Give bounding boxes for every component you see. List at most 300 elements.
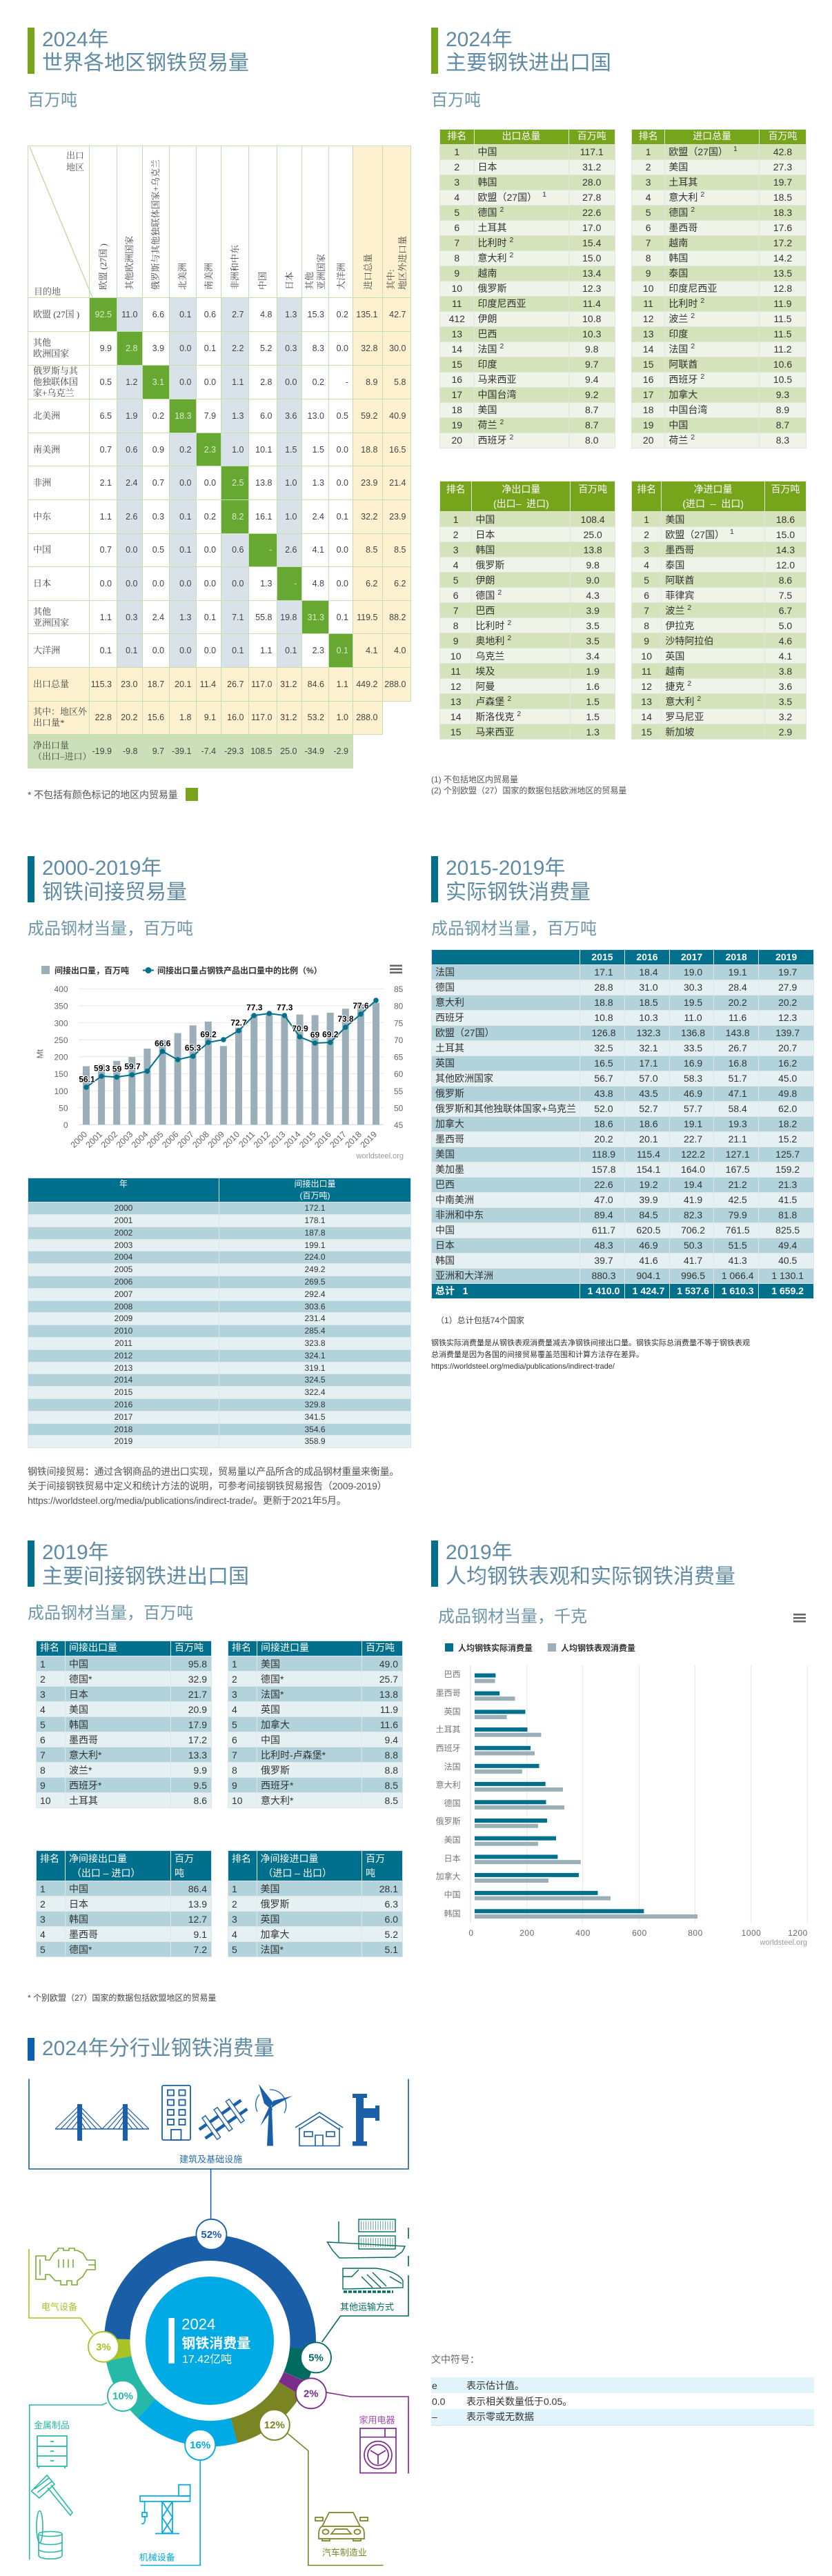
table: trade matrix: 117.0 <box>251 713 272 722</box>
heading: symbols: 文中符号： <box>431 2354 479 2365</box>
table: true steel use by country: 28.8 <box>594 982 613 993</box>
table: true steel use by country: 韩国 <box>435 1255 455 1266</box>
table: trade matrix: 0.1 <box>204 344 216 353</box>
table: trade matrix: 0.0 <box>337 344 348 353</box>
table: exports: 印度 <box>477 359 497 370</box>
icon: drawer cabinet <box>37 2436 67 2468</box>
title: per capita use: 人均钢铁表观和实际钢铁消费量 <box>446 1565 735 1588</box>
table: imports: 美国 <box>668 161 688 172</box>
table: indirect exports by year: 2000 <box>115 1203 132 1213</box>
table: true steel use by country: 20.2 <box>729 997 747 1008</box>
table: net indirect exports: 2 <box>40 1899 46 1910</box>
table: true steel use by country: 50.3 <box>684 1240 702 1251</box>
table: exports <box>439 129 615 448</box>
table: net indirect imports: 净间接进口量 <box>261 1853 319 1864</box>
table: imports: 欧盟（27国） 1 <box>668 145 737 157</box>
panel: symbols legend <box>431 2354 814 2426</box>
title: major exporters and importers: 主要钢铁进出口国 <box>446 52 611 75</box>
table: imports: 8 <box>646 252 651 264</box>
text block: true steel use definition <box>431 1338 750 1370</box>
text block: definition of indirect trade: https://worldsteel.org/media/publications/indirect-trade/。更新于2021年5月。 <box>28 1494 346 1505</box>
table: indirect imports: 排名 <box>232 1642 251 1653</box>
table: net exports: 埃及 <box>475 665 495 676</box>
table: imports: 16 <box>643 374 653 385</box>
table: indirect exports by year: 2012 <box>115 1351 132 1360</box>
table: trade matrix: 3.9 <box>152 344 164 353</box>
table: net exports: 马来西亚 <box>475 726 514 737</box>
table: true steel use by country: 俄罗斯 <box>435 1088 464 1099</box>
table: trade matrix: 0.2 <box>179 445 191 455</box>
x axis labels: 2008 <box>190 1129 211 1150</box>
table: trade matrix: 其中：地区外 <box>33 706 87 717</box>
x axis labels: 2006 <box>160 1129 181 1150</box>
table: trade matrix: 0.5 <box>152 545 164 555</box>
table: true steel use by country: 21.3 <box>778 1179 797 1190</box>
table: true steel use by country: 22.6 <box>594 1179 613 1190</box>
table: net imports: 8 <box>644 620 649 631</box>
left axis labels: 300 <box>54 1018 68 1028</box>
table: true steel use by country: 19.7 <box>778 967 797 978</box>
table: indirect exports: 6 <box>40 1734 46 1745</box>
right axis labels: 45 <box>394 1120 404 1130</box>
center total: 2024 <box>181 2315 215 2333</box>
table: imports: 8.3 <box>776 435 789 446</box>
x axis labels: 0 <box>468 1928 474 1938</box>
x axis labels: 2019 <box>359 1129 379 1150</box>
table: trade matrix: 16.5 <box>389 445 406 455</box>
x axis labels <box>468 1928 808 1938</box>
table: net imports: 5.0 <box>779 620 792 631</box>
country labels: 加拿大 <box>436 1871 461 1881</box>
x axis labels: 2015 <box>297 1129 318 1150</box>
table: true steel use by country: 27.9 <box>778 982 797 993</box>
table: trade matrix: 2.4 <box>126 478 138 488</box>
panel: major indirect steel exporters and importers <box>28 1540 403 2003</box>
table: indirect exports by year: 2014 <box>115 1375 132 1385</box>
table: net exports: 3.4 <box>586 650 600 661</box>
table: indirect exports by year: 358.9 <box>304 1436 326 1446</box>
label: mechanical equipment: 机械设备 <box>139 2553 175 2562</box>
table: exports: 13.4 <box>582 268 601 279</box>
table: net indirect imports: 3 <box>232 1914 237 1925</box>
table: trade matrix: 1.8 <box>179 713 191 722</box>
table: true steel use by country: 11.0 <box>684 1012 702 1023</box>
table: trade matrix: 0.0 <box>204 579 216 588</box>
table: indirect exports: 8 <box>40 1765 46 1776</box>
table: indirect imports: 8 <box>232 1765 237 1776</box>
table: net imports: 2.9 <box>779 726 792 737</box>
table: trade matrix: 32.2 <box>361 512 377 522</box>
icon: high-speed train <box>343 2268 403 2292</box>
table: net exports: 韩国 <box>475 544 495 555</box>
table: net indirect imports: 2 <box>232 1899 237 1910</box>
table: true steel use by country: 19.1 <box>684 1118 702 1129</box>
data labels: 59.3 <box>94 1063 110 1073</box>
table: exports: 9.4 <box>585 374 598 385</box>
table: net indirect imports: 5 <box>232 1944 237 1955</box>
icon: motor <box>36 2248 95 2285</box>
table: true steel use by country: 19.4 <box>684 1179 702 1190</box>
table: indirect exports by year: 2008 <box>115 1302 132 1311</box>
table: indirect exports by year: 187.8 <box>304 1228 326 1238</box>
table: indirect exports: 13.3 <box>188 1750 207 1761</box>
table: trade matrix: 南美洲 <box>33 444 60 455</box>
left axis labels: 50 <box>59 1104 68 1113</box>
table: indirect exports by year: 2019 <box>115 1436 132 1446</box>
table: trade matrix: 288.0 <box>384 680 406 689</box>
table: true steel use by country: 16.9 <box>684 1058 702 1069</box>
data labels: 77.3 <box>246 1002 263 1012</box>
title: sector use: 2024年分行业钢铁消费量 <box>42 2037 275 2060</box>
table: trade matrix: 0.5 <box>337 411 348 421</box>
table: net exports: 9 <box>453 635 459 646</box>
table: imports: 10 <box>643 283 653 294</box>
data labels: 72.7 <box>230 1018 247 1027</box>
electrical equipment connector <box>29 2249 93 2335</box>
sector diagram <box>28 2079 409 2566</box>
table: indirect exports by year: 341.5 <box>304 1412 326 1422</box>
subtitle: unit: 成品钢材当量，百万吨 <box>431 920 597 938</box>
table: net imports: 5 <box>644 574 649 585</box>
country labels: 日本 <box>444 1854 461 1863</box>
center total: 17.42亿吨 <box>182 2353 232 2366</box>
table: trade matrix: 中东 <box>33 511 51 522</box>
table: trade matrix: 其中: <box>386 269 396 290</box>
table: true steel use by country: 其他欧洲国家 <box>435 1073 493 1084</box>
table: trade matrix: 6.5 <box>100 411 112 421</box>
table: net exports: 3.5 <box>586 620 600 631</box>
table: trade matrix: 0.1 <box>204 613 216 622</box>
table: trade matrix: 净出口量 <box>33 740 69 751</box>
table: net imports: 意大利 2 <box>665 694 701 706</box>
center total <box>146 2277 274 2405</box>
table: true steel use by country: 40.5 <box>778 1255 797 1266</box>
table: trade matrix: 1.3 <box>179 613 191 622</box>
table: net exports: 巴西 <box>475 604 495 615</box>
table: imports: 3 <box>646 177 651 188</box>
x axis labels: 600 <box>632 1928 647 1938</box>
chart legend: 间接出口量占钢铁产品出口量中的比例（%） <box>157 965 322 975</box>
table: imports: 42.8 <box>773 146 792 157</box>
table: trade matrix: 地区外进口量 <box>397 236 408 290</box>
table: trade matrix: 北美洲 <box>33 410 60 421</box>
subtitle: unit: 百万吨 <box>28 91 77 110</box>
table: trade matrix: 8.5 <box>366 545 377 555</box>
table: trade matrix: 4.8 <box>313 579 324 588</box>
table: net indirect exports: 86.4 <box>188 1883 207 1894</box>
table: indirect exports: 百万吨 <box>175 1642 204 1653</box>
table: exports: 10.3 <box>582 328 601 339</box>
table: trade matrix: 0.3 <box>285 344 297 353</box>
table: exports: 9.2 <box>585 389 598 400</box>
table: indirect exports by year: 178.1 <box>304 1216 326 1225</box>
table: true steel use by country: 中南美洲 <box>435 1194 474 1205</box>
other transport connector <box>322 2228 408 2342</box>
icon: cable-stayed bridge <box>55 2104 149 2141</box>
panel: per capita steel use <box>431 1540 808 1947</box>
country labels: 美国 <box>444 1835 461 1845</box>
table: true steel use by country: 41.3 <box>729 1255 747 1266</box>
table: indirect exports: 9.9 <box>194 1765 207 1776</box>
table: net imports: 墨西哥 <box>665 544 694 555</box>
table: trade matrix: 非洲 <box>33 477 51 488</box>
left axis labels: 350 <box>54 1002 68 1011</box>
table: trade matrix: 1.0 <box>337 713 348 722</box>
table: true steel use by country: 82.3 <box>684 1209 702 1220</box>
table: trade matrix: 22.8 <box>95 713 112 722</box>
table: true steel use by country: 46.9 <box>639 1240 658 1251</box>
table: net imports: 4 <box>644 559 649 570</box>
table: exports: 117.1 <box>580 146 604 157</box>
construction bracket and connector <box>29 2079 408 2219</box>
table: true steel use by country: 美国 <box>435 1149 455 1160</box>
table: indirect exports <box>36 1641 212 1808</box>
table: net indirect imports: 28.1 <box>379 1883 398 1894</box>
country labels: 德国 <box>444 1798 461 1808</box>
table: trade matrix: 2.2 <box>232 344 244 353</box>
percentage values: 12% <box>264 2419 285 2431</box>
table: exports: 4 <box>454 192 459 203</box>
table: trade matrix: 8.3 <box>313 344 324 353</box>
footnote: * 个别欧盟（27）国家的数据包括欧盟地区的贸易量 <box>28 1993 216 2003</box>
table: net imports: 捷克 2 <box>665 679 691 691</box>
table: indirect exports by year: 2010 <box>115 1326 132 1336</box>
table: exports: 印度尼西亚 <box>477 298 526 309</box>
table: trade matrix: （出口–进口） <box>33 751 92 762</box>
table: exports: 荷兰 2 <box>477 418 504 430</box>
bars <box>83 1003 379 1124</box>
icon: railway tracks <box>195 2094 252 2145</box>
table: net exports: 1.3 <box>586 726 600 737</box>
table: net indirect imports: 4 <box>232 1929 237 1940</box>
table: trade matrix: 0.0 <box>204 478 216 488</box>
table: true steel use by country: 139.7 <box>775 1027 800 1038</box>
x axis labels: 2010 <box>221 1129 241 1150</box>
table: imports: 11.5 <box>773 328 792 339</box>
left axis labels: 250 <box>54 1036 68 1045</box>
table: net indirect exports: 3 <box>40 1914 46 1925</box>
table: trade matrix: 25.0 <box>280 746 297 756</box>
table: net exports: 1.5 <box>586 711 600 722</box>
table: exports: 排名 <box>447 130 466 141</box>
table: true steel use by country: 41.7 <box>684 1255 702 1266</box>
table: net imports: 英国 <box>665 650 684 661</box>
percentage badges <box>88 2219 331 2460</box>
table: true steel use by country: 17.1 <box>639 1058 658 1069</box>
table: net indirect exports: 1 <box>40 1883 46 1894</box>
footnotes <box>431 775 626 795</box>
table: indirect exports by year: 231.4 <box>304 1314 326 1323</box>
table: net indirect imports: （进口 – 出口） <box>263 1867 332 1879</box>
table: trade matrix: 18.3 <box>175 411 191 421</box>
table: trade matrix: 大洋洲 <box>336 263 346 290</box>
data labels: 77.6 <box>353 1001 369 1011</box>
table: symbols: 0.0 <box>432 2395 445 2406</box>
table: net indirect imports: 法国* <box>261 1944 284 1955</box>
table: trade matrix: 0.0 <box>204 646 216 655</box>
table: true steel use by country: 81.8 <box>778 1209 797 1220</box>
table: trade matrix: 1.1 <box>260 646 272 655</box>
table: trade matrix: -19.9 <box>92 746 112 756</box>
data labels: 66.6 <box>155 1038 171 1048</box>
table: trade matrix: 0.3 <box>126 613 138 622</box>
table: indirect exports: 中国 <box>69 1658 88 1670</box>
table: imports: 12.8 <box>773 283 792 294</box>
table: exports: 2 <box>454 161 459 172</box>
table: imports: 印度尼西亚 <box>668 283 717 294</box>
table: trade matrix: 南美洲 <box>204 263 214 290</box>
data labels: 73.8 <box>337 1014 354 1024</box>
table: indirect exports by year: 172.1 <box>304 1203 326 1213</box>
table: net exports: 阿曼 <box>475 680 495 691</box>
table: indirect imports: 1 <box>232 1658 237 1670</box>
table: imports: 13 <box>643 328 653 339</box>
table: true steel use by country: 32.1 <box>639 1042 658 1053</box>
table: trade matrix: 31.2 <box>280 680 297 689</box>
table: trade matrix: 1.0 <box>232 445 244 455</box>
table: net exports: 25.0 <box>584 528 602 539</box>
table: trade matrix: - <box>346 377 348 387</box>
table: trade matrix: -39.1 <box>172 746 191 756</box>
table: true steel use by country: 20.7 <box>778 1042 797 1053</box>
title: world steel trade: 2024年 <box>42 28 109 51</box>
table: indirect exports by year: 292.4 <box>304 1289 326 1299</box>
table: true steel use by country: 84.5 <box>639 1209 658 1220</box>
chart legend: 人均钢铁实际消费量 <box>458 1643 533 1653</box>
subtitle: unit: 百万吨 <box>431 91 481 110</box>
table: trade matrix: 0.0 <box>126 545 138 555</box>
icon: pipe section <box>353 2094 379 2146</box>
table: indirect exports: 7 <box>40 1750 46 1761</box>
table: trade matrix: 13.0 <box>308 411 324 421</box>
table: exports: 8.7 <box>585 404 598 415</box>
title: indirect trade: 2000-2019年 <box>42 857 161 880</box>
table: trade matrix: 6.2 <box>366 579 377 588</box>
table: imports: 韩国 <box>668 252 688 264</box>
table: trade matrix: 6.2 <box>394 579 406 588</box>
source credit: worldsteel.org <box>760 1939 807 1947</box>
table: true steel use by country: 1 424.7 <box>633 1285 664 1296</box>
data labels <box>79 1001 369 1084</box>
table: indirect exports: 墨西哥 <box>69 1734 98 1745</box>
table: trade matrix: 4.1 <box>313 545 324 555</box>
table: indirect imports: 8.5 <box>385 1795 398 1806</box>
title: world steel trade <box>28 28 249 75</box>
table: net indirect exports: 德国* <box>69 1944 92 1955</box>
table: indirect imports: 10 <box>232 1795 243 1806</box>
table: net exports: 百万吨 <box>578 484 607 495</box>
table: net indirect exports: 7.2 <box>194 1944 207 1955</box>
table: true steel use by country: 41.6 <box>639 1255 658 1266</box>
table: true steel use by country: 127.1 <box>726 1149 750 1160</box>
table: net exports: 5 <box>453 574 459 585</box>
table: trade matrix: 出口总量 <box>33 679 69 689</box>
table: true steel use by country: 12.3 <box>778 1012 797 1023</box>
table: indirect imports: 2 <box>232 1674 237 1685</box>
country labels: 墨西哥 <box>436 1688 461 1698</box>
data labels: 65.3 <box>185 1043 201 1053</box>
axis title: Mt <box>35 1049 45 1058</box>
title: indirect trade: 钢铁间接贸易量 <box>42 880 187 904</box>
table: imports: 13.5 <box>773 268 792 279</box>
table: net indirect exports: 9.1 <box>194 1929 207 1940</box>
table: net indirect imports <box>228 1850 403 1957</box>
table: indirect imports: 3 <box>232 1689 237 1700</box>
left axis labels: 400 <box>54 984 68 994</box>
right axis labels: 75 <box>394 1018 404 1028</box>
table: trade matrix: 0.1 <box>232 646 244 655</box>
table: true steel use by country: 1 410.0 <box>588 1285 620 1296</box>
table: trade matrix: 8.9 <box>366 377 377 387</box>
data labels: 56.1 <box>79 1074 95 1084</box>
table: trade matrix: 0.0 <box>179 478 191 488</box>
table: imports: 19.7 <box>773 177 792 188</box>
table: true steel use by country: 18.2 <box>778 1118 797 1129</box>
table: trade matrix: 9.1 <box>204 713 216 722</box>
table: trade matrix: 家+乌克兰 <box>33 388 74 398</box>
title: world steel trade: 世界各地区钢铁贸易量 <box>42 52 249 75</box>
table: true steel use by country: 19.3 <box>729 1118 747 1129</box>
table: net indirect exports: 韩国 <box>69 1914 88 1925</box>
table: trade matrix: 84.6 <box>308 680 324 689</box>
table: indirect exports: 意大利* <box>69 1750 101 1761</box>
table: net exports: 13 <box>450 695 461 706</box>
table: net exports: 15 <box>450 726 461 737</box>
table: imports: 加拿大 <box>668 389 697 400</box>
table: net indirect exports: （出口 – 进口） <box>72 1867 140 1879</box>
percentage values: 5% <box>308 2352 324 2364</box>
table: net exports: 1.9 <box>586 665 600 676</box>
table: true steel use by country: 德国 <box>435 982 455 993</box>
table: trade matrix: 7.1 <box>232 613 244 622</box>
table: imports: 荷兰 2 <box>668 433 695 446</box>
table: trade matrix: 1.1 <box>100 613 112 622</box>
table: trade matrix: 0.0 <box>337 579 348 588</box>
table: trade matrix: 目的地 <box>34 284 61 297</box>
table: true steel use by country: 41.9 <box>684 1194 702 1205</box>
table: trade matrix: 6.0 <box>260 411 272 421</box>
right axis labels: 65 <box>394 1053 404 1062</box>
table: true steel use by country: 30.3 <box>684 982 702 993</box>
table: net imports: 14 <box>641 711 652 722</box>
x axis labels: 200 <box>519 1928 535 1938</box>
data labels: 77.3 <box>277 1002 293 1012</box>
table: true steel use by country: 62.0 <box>778 1103 797 1114</box>
table: trade matrix: 其他欧洲国家 <box>124 236 135 290</box>
table: exports: 欧盟（27国） 1 <box>477 190 546 203</box>
table: indirect exports: 5 <box>40 1719 46 1730</box>
bar chart: per capita use by country <box>436 1614 808 1947</box>
table: indirect exports: 4 <box>40 1704 46 1715</box>
table: net imports: 12.0 <box>776 559 795 570</box>
table: true steel use by country: 非洲和中东 <box>435 1209 484 1220</box>
table: trade matrix: 0.1 <box>337 512 348 522</box>
table: exports: 9.7 <box>585 359 598 370</box>
table: net exports: 8 <box>453 620 459 631</box>
table: net exports: 斯洛伐克 2 <box>475 709 521 722</box>
table: trade matrix: 地区 <box>66 160 84 173</box>
table: exports: 10 <box>451 283 462 294</box>
table: indirect exports: 韩国 <box>69 1719 88 1730</box>
title: indirect importers and exporters: 2019年 <box>42 1541 109 1563</box>
label: metal products: 金属制品 <box>34 2420 70 2430</box>
table: exports: 韩国 <box>477 177 497 188</box>
center total: 钢铁消费量 <box>181 2336 250 2351</box>
table: trade matrix: 大洋洲 <box>33 645 60 655</box>
table: exports: 19 <box>451 419 462 430</box>
table: trade matrix: 4.8 <box>260 310 272 319</box>
table: imports: 10.5 <box>773 374 792 385</box>
